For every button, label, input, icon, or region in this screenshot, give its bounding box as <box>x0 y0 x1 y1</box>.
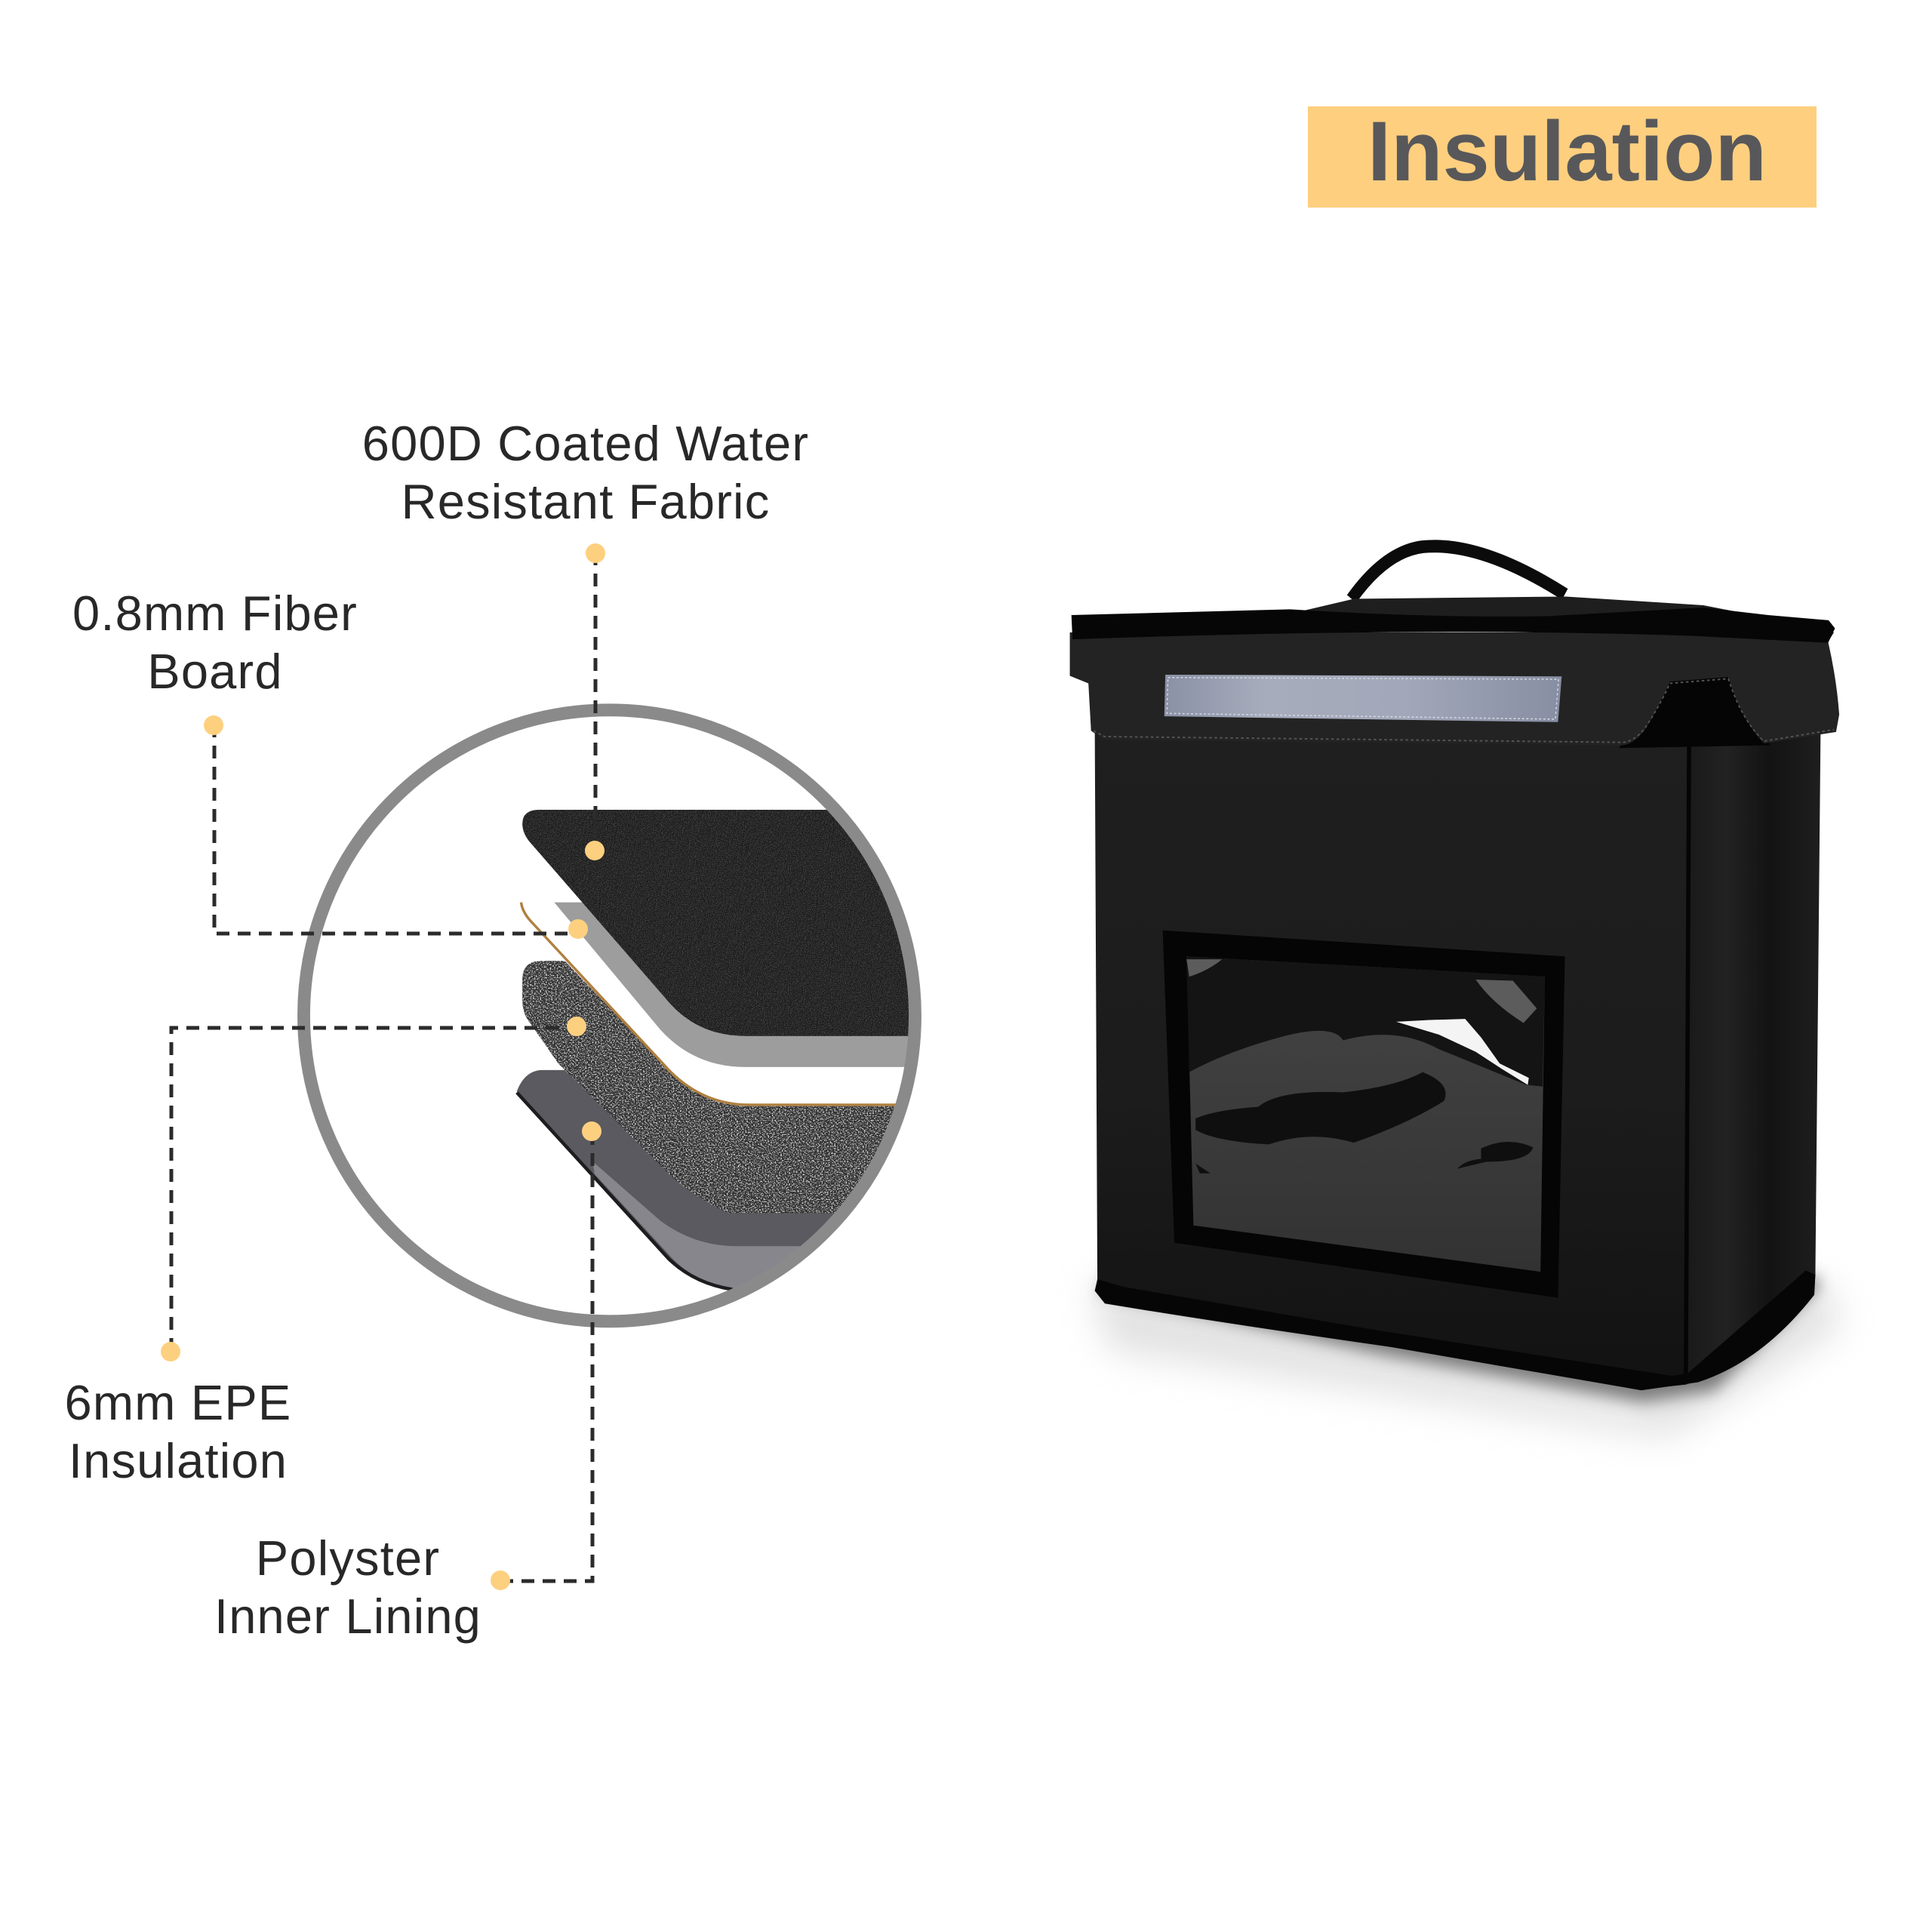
callout: 600D coated water resistant fabric: 600D Coated Water <box>362 416 809 471</box>
callout: fiber board: Board <box>147 644 283 699</box>
window reflection: white shine <box>1396 1019 1529 1084</box>
layer: 600D coated fabric <box>522 810 924 1036</box>
callout: EPE insulation <box>65 1017 586 1488</box>
bag front panel <box>1095 725 1689 1389</box>
magnifier ring <box>303 710 915 1321</box>
product photo: black insulated bag <box>1070 546 1842 1437</box>
layer: 0.8mm fiber board <box>521 903 924 1105</box>
callout: 600D coated water resistant fabric: Resistant Fabric <box>401 474 770 529</box>
lid top surface <box>1284 596 1768 626</box>
infographic canvas <box>66 106 1844 1644</box>
lid black piping <box>1072 608 1835 643</box>
handle <box>1352 546 1565 599</box>
stitching <box>1094 678 1834 743</box>
callout: polyester inner lining: Polyster <box>256 1531 440 1586</box>
callout: 600D coated water resistant fabric <box>362 416 809 860</box>
window frame <box>1163 931 1565 1298</box>
lid front flap <box>1070 632 1839 745</box>
callout: EPE insulation: Insulation <box>69 1433 288 1488</box>
window reflection: dark blobs <box>1195 1072 1533 1174</box>
window reflection: dark upper area <box>1186 956 1545 1087</box>
ground shadow <box>1088 1275 1842 1437</box>
lid gap <box>1619 675 1770 748</box>
window reflection: grey patches <box>1186 959 1537 1023</box>
bag side panel <box>1685 725 1820 1385</box>
layer cross-section magnifier <box>303 710 924 1321</box>
layer: polyester inner lining <box>515 1070 835 1291</box>
bottom trim <box>1095 1271 1815 1390</box>
front and side seam <box>1686 743 1689 1379</box>
callout: polyester inner lining: Inner Lining <box>214 1589 481 1644</box>
callout: polyester inner lining <box>214 1121 601 1644</box>
callout: fiber board <box>72 586 588 939</box>
callout: EPE insulation: 6mm EPE <box>65 1375 291 1430</box>
callout: fiber board: 0.8mm Fiber <box>72 586 358 641</box>
clear window pocket <box>1186 956 1545 1272</box>
title banner: Insulation: Insulation <box>1367 104 1767 198</box>
layer: 6mm EPE insulation <box>522 961 924 1213</box>
layer: grey backing <box>554 903 924 1067</box>
reflective strip <box>1164 675 1561 722</box>
